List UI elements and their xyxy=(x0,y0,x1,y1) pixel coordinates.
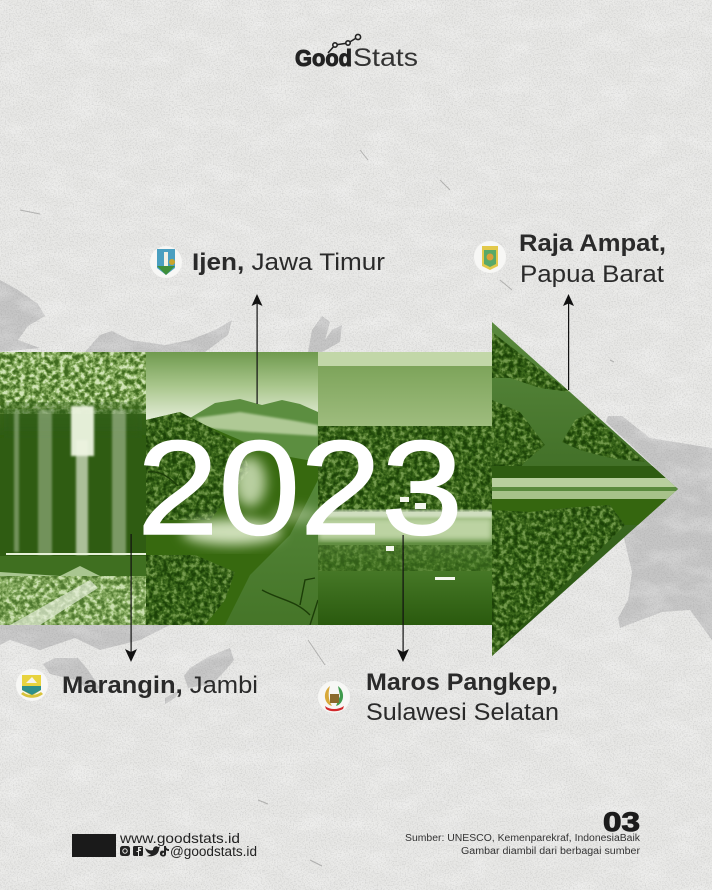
icon: Jawa Timur crest xyxy=(150,246,182,278)
text: Raja Ampat, Papua Barat xyxy=(519,230,666,288)
text: Maros Pangkep, Sulawesi Selatan xyxy=(366,669,559,726)
black logo block xyxy=(72,834,116,857)
big year: 2023: 2023 xyxy=(137,414,463,563)
label: Raja Ampat xyxy=(474,230,666,288)
arrow: Raja Ampat xyxy=(563,294,574,390)
icon: Papua Barat crest xyxy=(474,241,506,273)
photo: Maros Pangkep coast xyxy=(318,352,492,625)
website: www.goodstats.id xyxy=(119,830,240,846)
arrow banner of photos xyxy=(0,322,678,656)
background map silhouettes xyxy=(0,280,712,704)
source text: Gambar diambil dari berbagai sumber xyxy=(461,846,641,857)
label: Ijen xyxy=(150,246,385,278)
label: Maros Pangkep xyxy=(318,669,559,726)
icon: Jambi crest xyxy=(16,669,48,701)
source text xyxy=(405,833,641,857)
photo: Ijen volcano xyxy=(146,352,319,625)
page number: 03 xyxy=(603,807,640,837)
text: Marangin, Jambi: Marangin, Jambi xyxy=(62,672,258,699)
logo: GoodStats xyxy=(295,34,418,72)
photo: Raja Ampat lagoon xyxy=(492,322,678,656)
photo: Marangin waterfall xyxy=(0,352,146,625)
text: Ijen, Jawa Timur: Ijen, Jawa Timur xyxy=(192,249,385,276)
social icons xyxy=(120,846,169,857)
social handle: @goodstats.id xyxy=(170,844,257,859)
footer: page number and source xyxy=(405,807,641,857)
icon: Sulawesi Selatan crest xyxy=(318,681,350,713)
logo chart line xyxy=(328,34,361,53)
text: Maros Pangkep, Sulawesi Selatan: Sulawesi Selatan xyxy=(366,699,559,726)
label: Marangin xyxy=(16,669,258,701)
arrow: Maros Pangkep xyxy=(397,535,409,662)
logo wordmark: Good: Good xyxy=(295,45,352,71)
logo wordmark: Stats: Stats xyxy=(353,44,418,72)
arrow: Ijen xyxy=(252,294,262,404)
text: Raja Ampat, Papua Barat: Papua Barat xyxy=(520,261,664,288)
arrow: Marangin xyxy=(125,534,137,662)
text: Raja Ampat, Papua Barat: Raja Ampat, xyxy=(519,230,666,257)
text: Maros Pangkep, Sulawesi Selatan: Maros Pangkep, xyxy=(366,669,558,696)
footer: brand block xyxy=(72,830,257,859)
source text: Sumber: UNESCO, Kemenparekraf, IndonesiaBaik xyxy=(405,833,641,844)
